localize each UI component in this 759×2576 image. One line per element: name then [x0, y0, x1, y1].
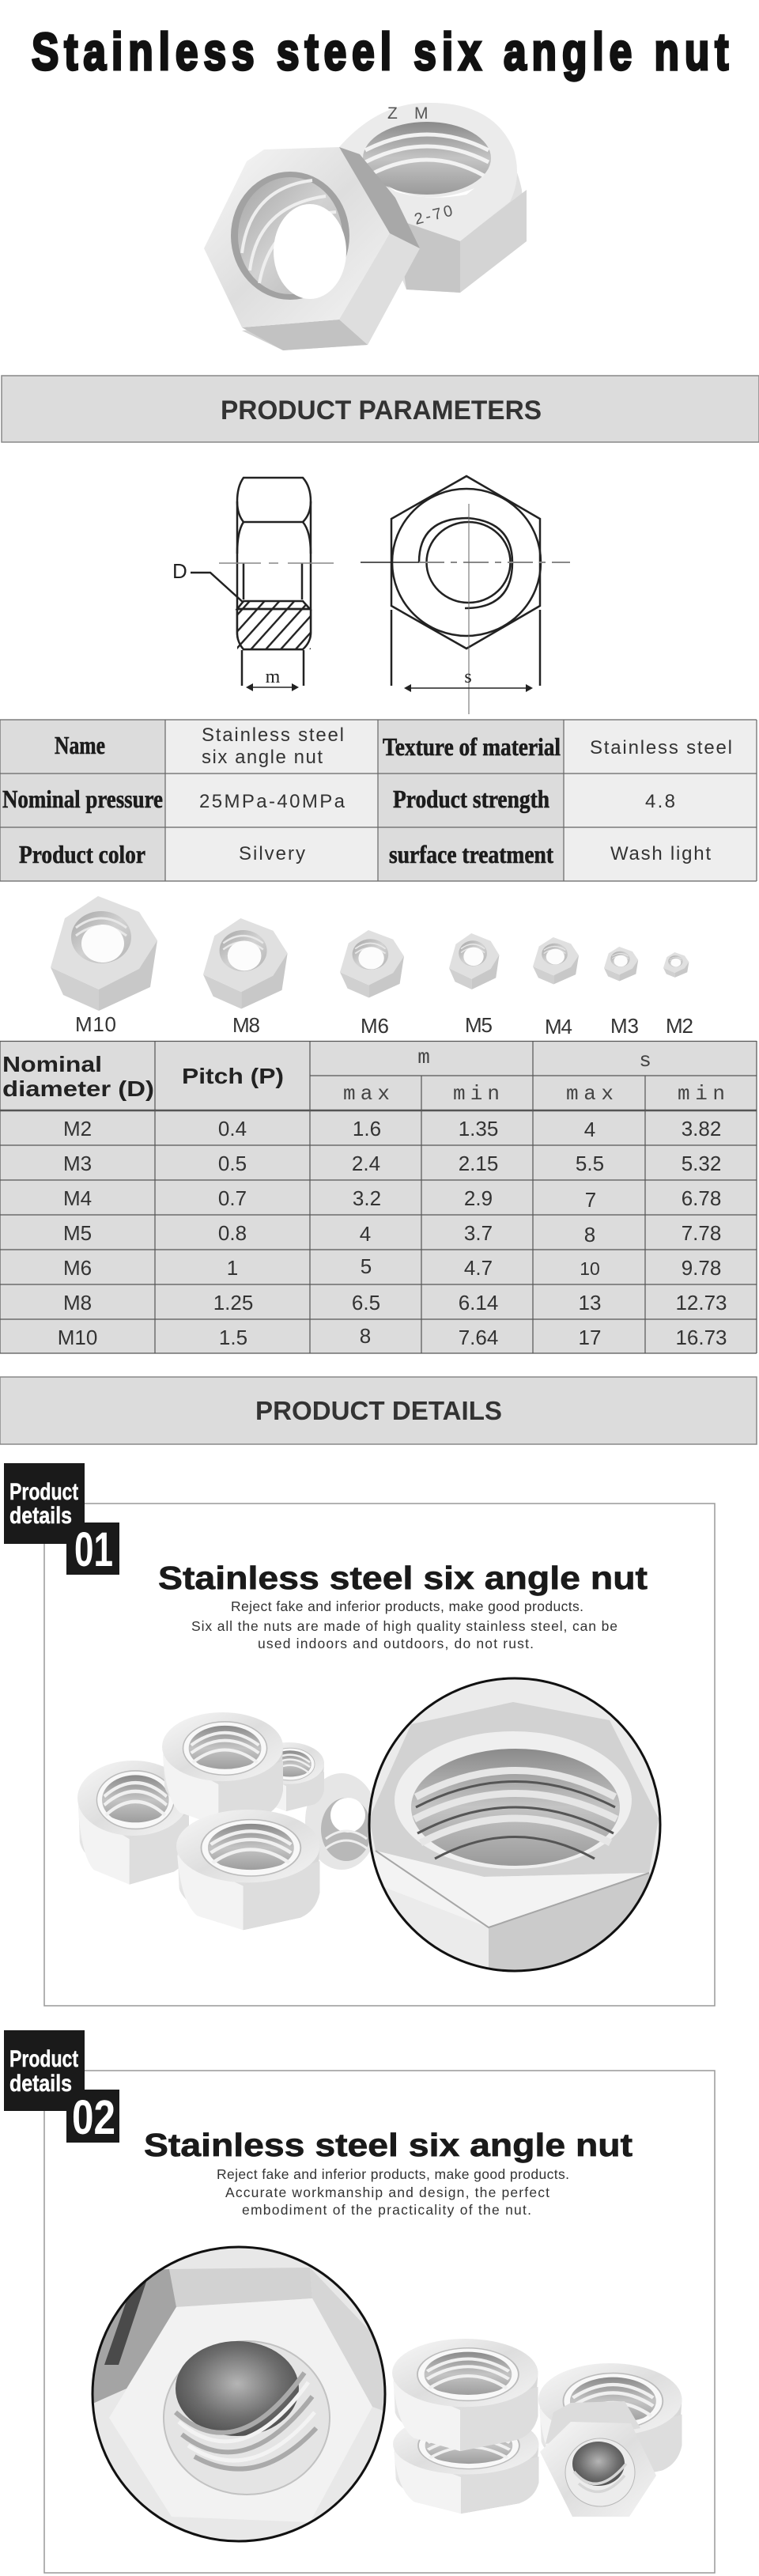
- nut size lineup photos: [51, 896, 693, 1038]
- table header: m: [417, 1046, 430, 1069]
- banner: product details: PRODUCT DETAILS: [255, 1396, 502, 1425]
- table rows: 2.4: [352, 1152, 380, 1175]
- table header: min: [453, 1082, 500, 1106]
- dimensions table: [0, 1041, 757, 1353]
- small front nut: [540, 2401, 656, 2517]
- table rows: 5: [361, 1254, 372, 1278]
- badge 01: Product: [9, 1479, 78, 1505]
- table rows: 3.82: [682, 1117, 721, 1140]
- description: [191, 1598, 617, 1651]
- description: Accurate workmanship and design, the perfect: [225, 2184, 549, 2200]
- badge 01: [4, 1463, 119, 1576]
- badge 02: details: [9, 2071, 72, 2097]
- M2 nut: M2: [666, 1014, 693, 1038]
- panel: detail 02: [4, 2030, 715, 2573]
- table rows: M4: [63, 1186, 92, 1210]
- table rows: 7.64: [459, 1326, 498, 1349]
- M3 nut: [604, 947, 639, 1038]
- M5 nut: M5: [465, 1013, 493, 1037]
- badge 02: Product: [9, 2046, 78, 2072]
- panel: detail 01: [4, 1463, 715, 2006]
- technical drawing: front view: [361, 476, 570, 714]
- specification table: 25MPa-40MPa: [199, 791, 346, 812]
- table rows: 0.7: [218, 1186, 247, 1210]
- banner: product details: [0, 1377, 757, 1444]
- table rows: M6: [63, 1256, 92, 1280]
- M10 nut: M10: [75, 1012, 116, 1036]
- rear nut: [253, 1742, 324, 1811]
- specification table: Stainless steel: [202, 724, 344, 746]
- table rows: [58, 1117, 727, 1349]
- specification table: Stainless steel: [590, 737, 732, 758]
- stamped marking: 2-70: [413, 202, 457, 229]
- description: used indoors and outdoors, do not rust.: [258, 1636, 534, 1651]
- description: embodiment of the practicality of the nut.: [242, 2202, 531, 2218]
- table rows: 13: [579, 1291, 601, 1314]
- photo: group of nuts: [77, 1712, 378, 1930]
- table rows: 8: [584, 1223, 595, 1246]
- M10 nut: [51, 896, 157, 1036]
- M6 nut: [340, 930, 404, 1038]
- specification table: 4.8: [645, 791, 675, 812]
- table rows: 6.5: [352, 1291, 380, 1314]
- heading: Stainless steel six angle nut: [158, 1560, 648, 1596]
- table rows: 17: [579, 1326, 601, 1349]
- top nut: [162, 1712, 283, 1826]
- M6 nut: M6: [361, 1014, 389, 1038]
- table header: s: [639, 1049, 651, 1072]
- table rows: 16.73: [675, 1326, 727, 1349]
- table rows: 5.32: [682, 1152, 721, 1175]
- table rows: 0.5: [218, 1152, 247, 1175]
- table rows: 3.7: [464, 1221, 493, 1245]
- table rows: 1.5: [219, 1326, 247, 1349]
- M2 nut: [663, 952, 693, 1038]
- table rows: M5: [63, 1221, 92, 1245]
- specification table: Texture of material: [383, 732, 561, 761]
- specification table: Product strength: [393, 785, 549, 813]
- badge 02: 02: [72, 2090, 115, 2144]
- table rows: 1.6: [353, 1117, 381, 1140]
- specification table: [0, 720, 757, 881]
- upper stacked nut: [392, 2339, 538, 2451]
- badge 02: [4, 2030, 119, 2144]
- table header: min: [678, 1082, 725, 1106]
- front nut: [176, 1810, 319, 1930]
- badge 01: details: [9, 1503, 72, 1529]
- table rows: 4: [360, 1222, 371, 1246]
- banner: product parameters: PRODUCT PARAMETERS: [221, 395, 542, 426]
- label: D: D: [172, 559, 187, 583]
- M4 nut: [533, 937, 579, 1038]
- table header: max: [566, 1082, 614, 1106]
- table header: diameter (D): [2, 1076, 154, 1101]
- stamped marking: M: [414, 104, 429, 123]
- table header: max: [343, 1082, 390, 1106]
- table rows: M8: [63, 1291, 92, 1314]
- M5 nut: [449, 933, 499, 1037]
- flat nut: [305, 1773, 378, 1870]
- stamped marking: Z: [387, 104, 398, 123]
- lower stacked nut: [393, 2414, 539, 2514]
- specification table: Silvery: [239, 843, 305, 864]
- right nut: [538, 2363, 682, 2483]
- table rows: 12.73: [675, 1291, 727, 1314]
- table rows: 6.78: [682, 1186, 721, 1210]
- table rows: 0.4: [218, 1117, 247, 1140]
- M8 nut: M8: [232, 1013, 260, 1037]
- table rows: 6.14: [459, 1291, 498, 1314]
- banner: product parameters: [2, 376, 759, 442]
- table rows: 0.8: [218, 1221, 247, 1245]
- table header: Nominal: [2, 1052, 102, 1076]
- table rows: 2.9: [464, 1186, 493, 1210]
- description: Reject fake and inferior products, make good products.: [231, 1598, 583, 1614]
- label: s: s: [464, 667, 472, 687]
- table rows: 10: [580, 1258, 600, 1279]
- table rows: M10: [58, 1326, 97, 1349]
- table rows: M3: [63, 1152, 92, 1175]
- technical drawing: side view: [172, 478, 334, 691]
- specification table: Name: [55, 731, 105, 759]
- table rows: 4.7: [464, 1256, 493, 1280]
- table rows: 7: [585, 1188, 596, 1212]
- description: [217, 2166, 569, 2218]
- magnified circle: [364, 1673, 668, 1977]
- specification table: six angle nut: [202, 747, 323, 768]
- magnified circle: [87, 2242, 391, 2547]
- heading: Stainless steel six angle nut: [144, 2127, 632, 2163]
- photo: stacked nuts: [392, 2339, 682, 2517]
- front nut: [204, 147, 420, 350]
- specification table: surface treatment: [389, 840, 553, 868]
- table rows: 9.78: [682, 1256, 721, 1280]
- M8 nut: [203, 918, 288, 1037]
- description: Reject fake and inferior products, make good products.: [217, 2166, 569, 2182]
- specification table: Product color: [19, 840, 145, 868]
- table rows: 1.35: [459, 1117, 498, 1140]
- hero photo: two steel hex nuts: [204, 103, 527, 350]
- table header: [2, 1046, 725, 1106]
- M4 nut: M4: [545, 1015, 572, 1038]
- specification table: Nominal pressure: [2, 785, 163, 813]
- table rows: 1.25: [213, 1291, 253, 1314]
- title: Stainless steel six angle nut: [32, 22, 728, 81]
- table rows: 1: [227, 1256, 238, 1280]
- left nut: [77, 1761, 189, 1885]
- table rows: 7.78: [682, 1221, 721, 1245]
- specification table: Wash light: [610, 843, 711, 864]
- back nut: [339, 103, 527, 293]
- table rows: 8: [360, 1324, 371, 1348]
- table rows: 2.15: [459, 1152, 498, 1175]
- table rows: M2: [63, 1117, 92, 1140]
- table rows: 4: [584, 1118, 595, 1141]
- badge 01: 01: [74, 1523, 113, 1576]
- table header: Pitch (P): [182, 1064, 284, 1088]
- table rows: 3.2: [353, 1186, 381, 1210]
- table rows: 5.5: [576, 1152, 604, 1175]
- stamped marking: [387, 104, 457, 229]
- label: m: m: [266, 667, 281, 687]
- M3 nut: M3: [610, 1014, 639, 1038]
- description: Six all the nuts are made of high quality stainless steel, can be: [191, 1618, 617, 1634]
